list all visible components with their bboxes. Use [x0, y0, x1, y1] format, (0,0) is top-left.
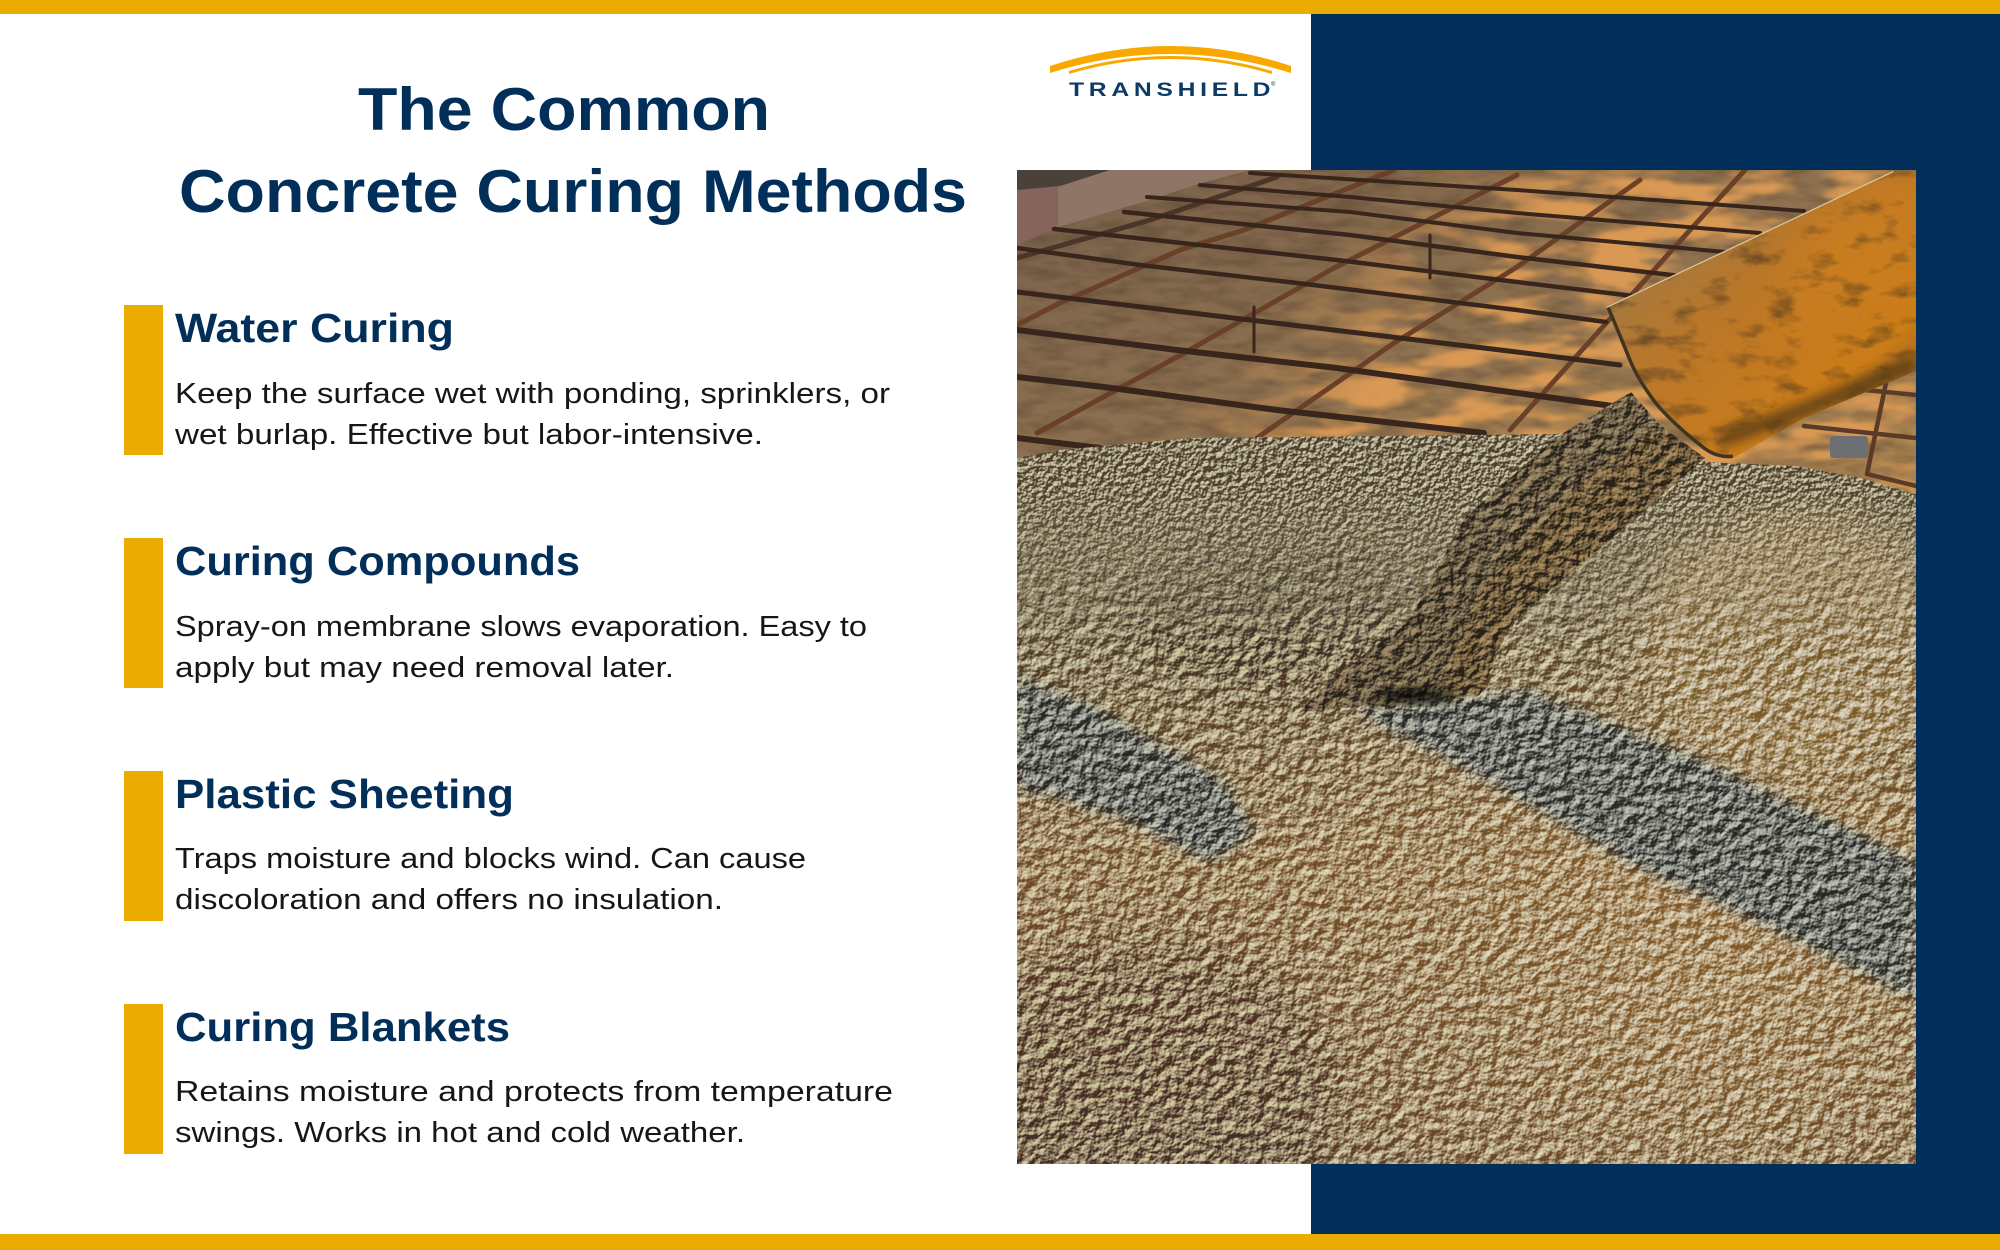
concrete slab [1017, 433, 1916, 1164]
sand ground [1017, 170, 1916, 500]
text: plastic sheeting description [175, 843, 806, 916]
bottom accent bar [0, 1234, 2000, 1250]
text: water curing description: wet burlap. Effective but labor-intensive. [174, 419, 763, 451]
shadow: right [1351, 690, 1916, 1000]
shadow: left [1017, 678, 1255, 862]
logo registered mark: ® [1271, 81, 1276, 88]
logo wordmark: TRANSHIELD [1069, 79, 1271, 100]
brick wall corner [1017, 170, 1250, 245]
title [179, 76, 967, 225]
heading: plastic sheeting: Plastic Sheeting [175, 771, 514, 817]
concrete stream [1300, 392, 1705, 712]
accent bar: plastic sheeting [124, 771, 163, 921]
panel: curing blankets [124, 1004, 893, 1154]
text: plastic sheeting description: Traps moisture and blocks wind. Can cause [175, 843, 806, 875]
title: The Common [358, 76, 770, 143]
text: curing blankets description: swings. Works in hot and cold weather. [175, 1117, 745, 1149]
title: Concrete Curing Methods [179, 158, 967, 225]
panel: curing compounds [124, 538, 867, 688]
metal pipe [1830, 436, 1868, 458]
logo: Transhield [1050, 46, 1291, 100]
photo: concrete pouring onto rebar grid [1017, 170, 1916, 1164]
text: curing compounds description: Spray-on membrane slows evaporation. Easy to [175, 611, 867, 643]
panel: water curing [124, 305, 890, 455]
accent bar: curing blankets [124, 1004, 163, 1154]
panel: plastic sheeting [124, 771, 806, 921]
accent bar: water curing [124, 305, 163, 455]
logo arcs [1050, 46, 1291, 74]
text: water curing description [174, 378, 890, 451]
rebar grid [1017, 170, 1916, 486]
top accent bar [0, 0, 2000, 14]
panel: navy right background [1311, 14, 2000, 1234]
heading: curing blankets: Curing Blankets [175, 1004, 510, 1050]
heading: water curing: Water Curing [175, 305, 454, 351]
text: plastic sheeting description: discoloration and offers no insulation. [175, 884, 723, 916]
concrete texture: fine pebbles [1017, 433, 1916, 636]
text: curing blankets description: Retains moisture and protects from temperature [175, 1076, 893, 1108]
accent bar: curing compounds [124, 538, 163, 688]
text: curing compounds description [175, 611, 867, 684]
concrete chute [1600, 170, 1920, 460]
text: curing blankets description [175, 1076, 893, 1149]
text: water curing description: Keep the surface wet with ponding, sprinklers, or [175, 378, 890, 410]
text: curing compounds description: apply but may need removal later. [175, 652, 674, 684]
heading: curing compounds: Curing Compounds [175, 538, 580, 584]
concrete texture: coarse surface [1017, 504, 1916, 1164]
